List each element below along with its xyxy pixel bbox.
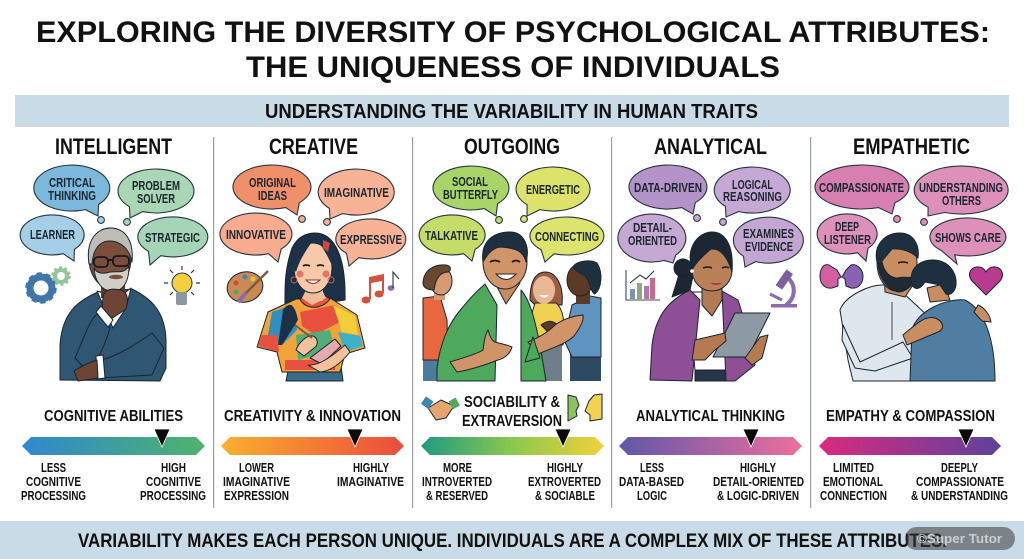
title	[36, 16, 990, 84]
speech bubbles: analytical: LOGICAL	[732, 178, 773, 192]
speech bubbles: creative	[220, 165, 406, 266]
speech bubbles: empathetic: SHOWS CARE	[935, 231, 1001, 245]
icon: heart	[970, 267, 1002, 295]
speech bubbles: outgoing: ENERGETIC	[526, 183, 580, 197]
speech bubbles: analytical: ORIENTED	[628, 234, 677, 248]
scale end labels: creativity	[223, 461, 404, 503]
scale end labels: creativity: IMAGINATIVE	[337, 475, 404, 489]
scale end labels: empathy: EMOTIONAL	[823, 475, 883, 489]
title: EXPLORING THE DIVERSITY OF PSYCHOLOGICAL ATTRIBUTES:	[36, 16, 990, 49]
gradient scale: sociability	[421, 429, 604, 455]
scale end labels: sociability: MORE	[443, 461, 472, 475]
scale end labels: cognitive: COGNITIVE	[26, 475, 81, 489]
speech bubbles: creative: INNOVATIVE	[226, 228, 286, 242]
scale end labels: analytical: LOGIC	[637, 489, 667, 503]
heading: creative: CREATIVE	[269, 134, 358, 159]
watermark: ©Super Tutor	[917, 531, 1002, 546]
scale end labels: cognitive: PROCESSING	[140, 489, 206, 503]
subtitle banner: UNDERSTANDING THE VARIABILITY IN HUMAN TRAITS	[265, 101, 758, 123]
scale end labels: cognitive: LESS	[41, 461, 66, 475]
gradient scale: creativity	[221, 429, 404, 455]
icon: handshake	[421, 396, 460, 420]
footer banner	[0, 521, 1024, 559]
scale label: sociability	[462, 394, 562, 430]
speech bubbles: analytical: EXAMINES	[743, 227, 794, 241]
scale end labels: sociability: HIGHLY	[547, 461, 584, 475]
scale end labels: analytical: & LOGIC-DRIVEN	[717, 489, 799, 503]
scale end labels: analytical: LESS	[640, 461, 664, 475]
scale end labels: creativity: LOWER	[239, 461, 274, 475]
panel: creative	[220, 134, 406, 503]
scale end labels: creativity: HIGHLY	[353, 461, 390, 475]
scale end labels: empathy: LIMITED	[833, 461, 874, 475]
scale end labels: cognitive: COGNITIVE	[146, 475, 201, 489]
scale end labels: creativity: EXPRESSION	[224, 489, 289, 503]
heading: analytical: ANALYTICAL	[654, 134, 767, 159]
scale end labels: cognitive: HIGH	[161, 461, 186, 475]
speech bubbles: intelligent: CRITICAL	[49, 176, 95, 190]
speech bubbles: creative: ORIGINAL	[249, 176, 296, 190]
speech bubbles: creative: IMAGINATIVE	[324, 186, 389, 200]
illustration: thoughtful older man	[60, 228, 166, 381]
scale label: analytical thinking: ANALYTICAL THINKING	[636, 408, 785, 425]
panel: outgoing	[419, 134, 604, 503]
speech bubbles: intelligent: LEARNER	[30, 228, 75, 242]
subtitle banner	[15, 95, 1009, 127]
scale end labels: analytical: DATA-BASED	[619, 475, 684, 489]
speech bubbles: outgoing: TALKATIVE	[425, 229, 478, 243]
scale end labels: empathy	[820, 461, 1008, 503]
panel: analytical	[618, 134, 804, 503]
scale label: sociability: EXTRAVERSION	[462, 413, 562, 430]
scale label: sociability: SOCIABILITY &	[464, 394, 560, 411]
icon: music notes	[362, 272, 399, 304]
speech bubbles: outgoing: CONNECTING	[535, 230, 599, 244]
scale end labels: sociability: & RESERVED	[426, 489, 488, 503]
speech bubbles: analytical	[618, 165, 803, 267]
figure: main man in green	[437, 232, 583, 381]
speech bubbles: outgoing: SOCIAL	[452, 175, 488, 189]
scale end labels: sociability: EXTROVERTED	[528, 475, 601, 489]
icon: two faces listening	[820, 265, 863, 288]
speech bubbles: intelligent: SOLVER	[137, 192, 175, 206]
scale label: creativity: CREATIVITY & INNOVATION	[224, 408, 401, 425]
figure: man in blue	[541, 261, 601, 381]
speech bubbles: creative: IDEAS	[258, 189, 287, 203]
scale end labels: sociability: & SOCIABLE	[535, 489, 595, 503]
icon: light bulb	[164, 266, 200, 305]
scale end labels: cognitive	[21, 461, 206, 503]
scale end labels: sociability	[422, 461, 601, 503]
scale end labels: analytical: DETAIL-ORIENTED	[713, 475, 804, 489]
illustration: creative young woman	[257, 233, 365, 381]
icon: paint palette	[224, 268, 268, 306]
heading: intelligent: INTELLIGENT	[55, 134, 172, 159]
figure: left friend	[423, 265, 452, 381]
illustration: woman with tablet	[650, 232, 770, 381]
scale end labels: analytical	[619, 461, 804, 503]
icon: bar chart	[626, 270, 660, 300]
speech bubbles: intelligent: PROBLEM	[132, 179, 180, 193]
scale end labels: empathy: COMPASSIONATE	[916, 475, 1004, 489]
figure: woman in yellow	[530, 272, 564, 381]
speech bubbles: empathetic: LISTENER	[824, 233, 871, 247]
speech bubbles: outgoing: BUTTERFLY	[443, 188, 498, 202]
icon: gears	[27, 268, 70, 302]
speech bubbles: creative: EXPRESSIVE	[340, 233, 402, 247]
scale end labels: cognitive: PROCESSING	[21, 489, 86, 503]
heading: empathetic: EMPATHETIC	[853, 134, 970, 159]
speech bubbles: analytical: DETAIL-	[633, 221, 672, 235]
speech bubbles: outgoing	[419, 166, 604, 262]
speech bubbles: intelligent: STRATEGIC	[145, 231, 200, 245]
icon: microscope	[770, 270, 797, 308]
heading: outgoing: OUTGOING	[464, 134, 560, 159]
speech bubbles: empathetic	[815, 165, 1008, 264]
speech bubbles: analytical: DATA-DRIVEN	[634, 181, 702, 195]
scale end labels: creativity: IMAGINATIVE	[223, 475, 290, 489]
scale end labels: empathy: DEEPLY	[941, 461, 978, 475]
panel: intelligent	[20, 134, 208, 503]
illustration: man comforting friend	[840, 233, 995, 381]
illustration: group conversation	[423, 232, 601, 381]
panel: empathetic	[815, 134, 1008, 503]
speech bubbles: intelligent: THINKING	[48, 189, 96, 203]
speech bubbles: empathetic: OTHERS	[942, 194, 981, 208]
watermark	[905, 527, 1015, 550]
speech bubbles: analytical: EVIDENCE	[745, 240, 793, 254]
speech bubbles: intelligent	[20, 165, 208, 265]
speech bubbles: empathetic: DEEP	[835, 220, 859, 234]
speech bubbles: analytical: REASONING	[723, 190, 782, 204]
gradient scale: empathy	[819, 429, 1001, 455]
speech bubbles: empathetic: COMPASSIONATE	[819, 181, 904, 195]
gradient scale: cognitive	[22, 429, 205, 455]
scale end labels: analytical: HIGHLY	[740, 461, 777, 475]
gradient scale: analytical	[619, 429, 802, 455]
scale end labels: sociability: INTROVERTED	[422, 475, 492, 489]
icon: talking heads	[568, 394, 602, 421]
scale label: cognitive abilities: COGNITIVE ABILITIES	[44, 408, 183, 425]
scale end labels: empathy: CONNECTION	[820, 489, 887, 503]
title: THE UNIQUENESS OF INDIVIDUALS	[246, 51, 780, 84]
